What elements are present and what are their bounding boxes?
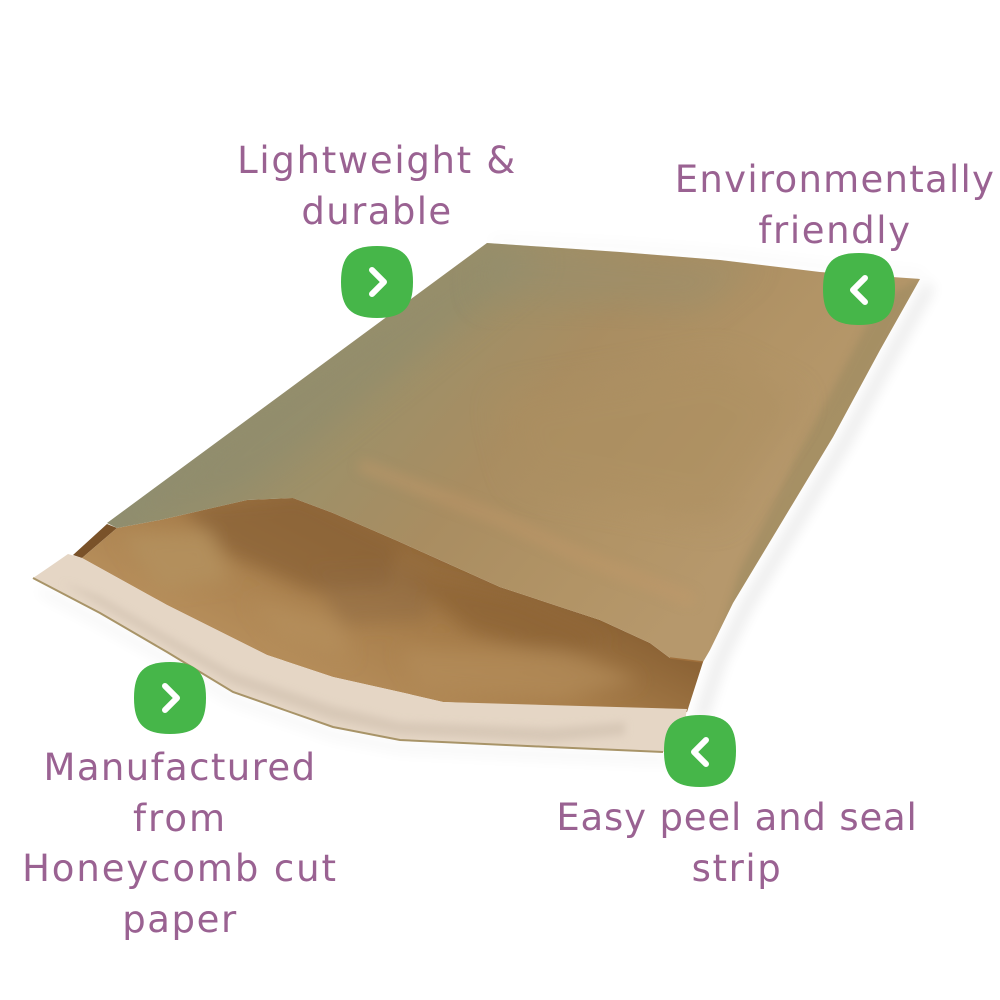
label: lightweight and durable: Lightweight & bbox=[237, 139, 517, 182]
label: honeycomb cut paper: paper bbox=[122, 898, 238, 940]
front seam bbox=[364, 464, 452, 502]
label: peel and seal strip: strip bbox=[692, 846, 782, 890]
label: peel and seal strip bbox=[556, 796, 918, 890]
flap right fold band bbox=[722, 280, 920, 624]
peel and seal strip bbox=[33, 554, 687, 752]
inner paper shading bbox=[142, 498, 624, 694]
label: lightweight and durable bbox=[237, 139, 517, 232]
flap centre warm tone bbox=[500, 360, 800, 520]
label: environmentally friendly: Environmentally bbox=[675, 158, 995, 201]
label: honeycomb cut paper: Manufactured bbox=[44, 746, 316, 789]
label: honeycomb cut paper: Honeycomb cut bbox=[22, 847, 338, 890]
icon: left arrow badge bottom bbox=[664, 715, 736, 787]
inner paper bbox=[82, 498, 703, 712]
label: honeycomb cut paper: from bbox=[133, 796, 227, 840]
label: honeycomb cut paper bbox=[22, 746, 338, 940]
flap fold line bbox=[670, 658, 703, 662]
label: peel and seal strip: Easy peel and seal bbox=[556, 796, 918, 839]
label: environmentally friendly: friendly bbox=[758, 208, 912, 252]
envelope illustration bbox=[32, 243, 932, 753]
label: lightweight and durable: durable bbox=[301, 190, 453, 232]
flap top tone bbox=[624, 271, 710, 296]
icon: right arrow badge bottom bbox=[134, 662, 206, 734]
label: environmentally friendly bbox=[675, 158, 995, 252]
back panel slot bbox=[73, 524, 117, 558]
envelope front panel bbox=[107, 243, 925, 662]
icon: right arrow badge top bbox=[341, 246, 854, 325]
envelope shadow bbox=[40, 240, 930, 760]
strip grey release band bbox=[62, 582, 625, 742]
flap left grey-green tone bbox=[196, 253, 474, 458]
icon: left arrow badge top bbox=[823, 253, 895, 325]
